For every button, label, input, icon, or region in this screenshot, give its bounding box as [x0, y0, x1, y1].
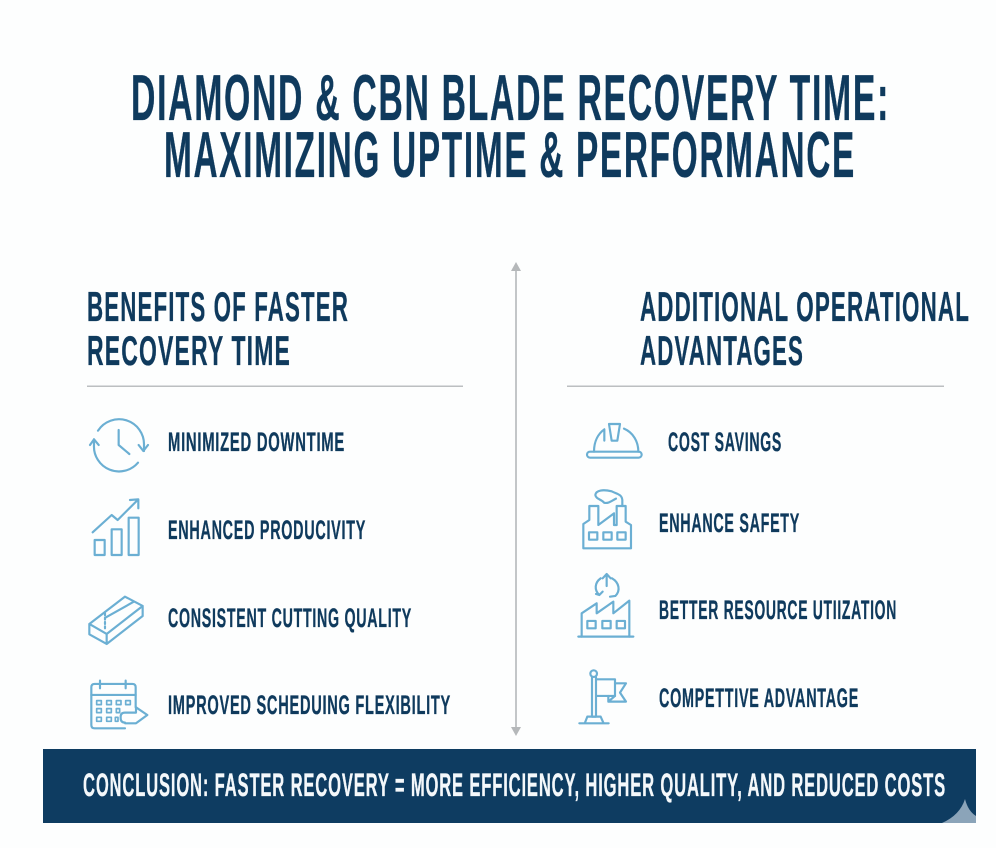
icon: factory with smoke	[583, 490, 631, 548]
icon: hard hat	[587, 424, 642, 458]
text: improved scheduling flexibility: IMPROVED SCHEDUING FLEXIBILITY	[168, 690, 451, 720]
panel: additional operational advantages	[567, 283, 970, 723]
heading: benefits: RECOVERY TIME	[87, 327, 291, 374]
heading: additional advantages	[640, 283, 970, 374]
title	[131, 61, 890, 191]
icon: bar chart with rising arrow	[93, 499, 139, 555]
arrow: vertical divider	[511, 262, 521, 736]
text: enhance safety: ENHANCE SAFETY	[659, 508, 800, 538]
icon: factory with recycle arrows	[578, 574, 633, 637]
icon: metal block	[89, 597, 143, 644]
heading: benefits: BENEFITS OF FASTER	[87, 283, 349, 330]
text: minimized downtime: MINIMIZED DOWNTIME	[168, 427, 345, 457]
text: cost savings: COST SAVINGS	[668, 427, 782, 457]
icon: flag	[579, 670, 626, 723]
panel: benefits of faster recovery time	[87, 283, 463, 728]
icon: clock with cycle arrows	[90, 419, 148, 471]
decorative corner peak	[942, 799, 976, 823]
heading: additional advantages: ADVANTAGES	[640, 327, 804, 374]
heading: benefits	[87, 283, 349, 374]
conclusion banner	[43, 749, 976, 823]
text: enhanced productivity: ENHANCED PRODUCIVITY	[168, 515, 366, 545]
icon: calendar with arrow	[91, 681, 147, 728]
text: consistent cutting quality: CONSISTENT CUTTING QUALITY	[168, 603, 412, 633]
